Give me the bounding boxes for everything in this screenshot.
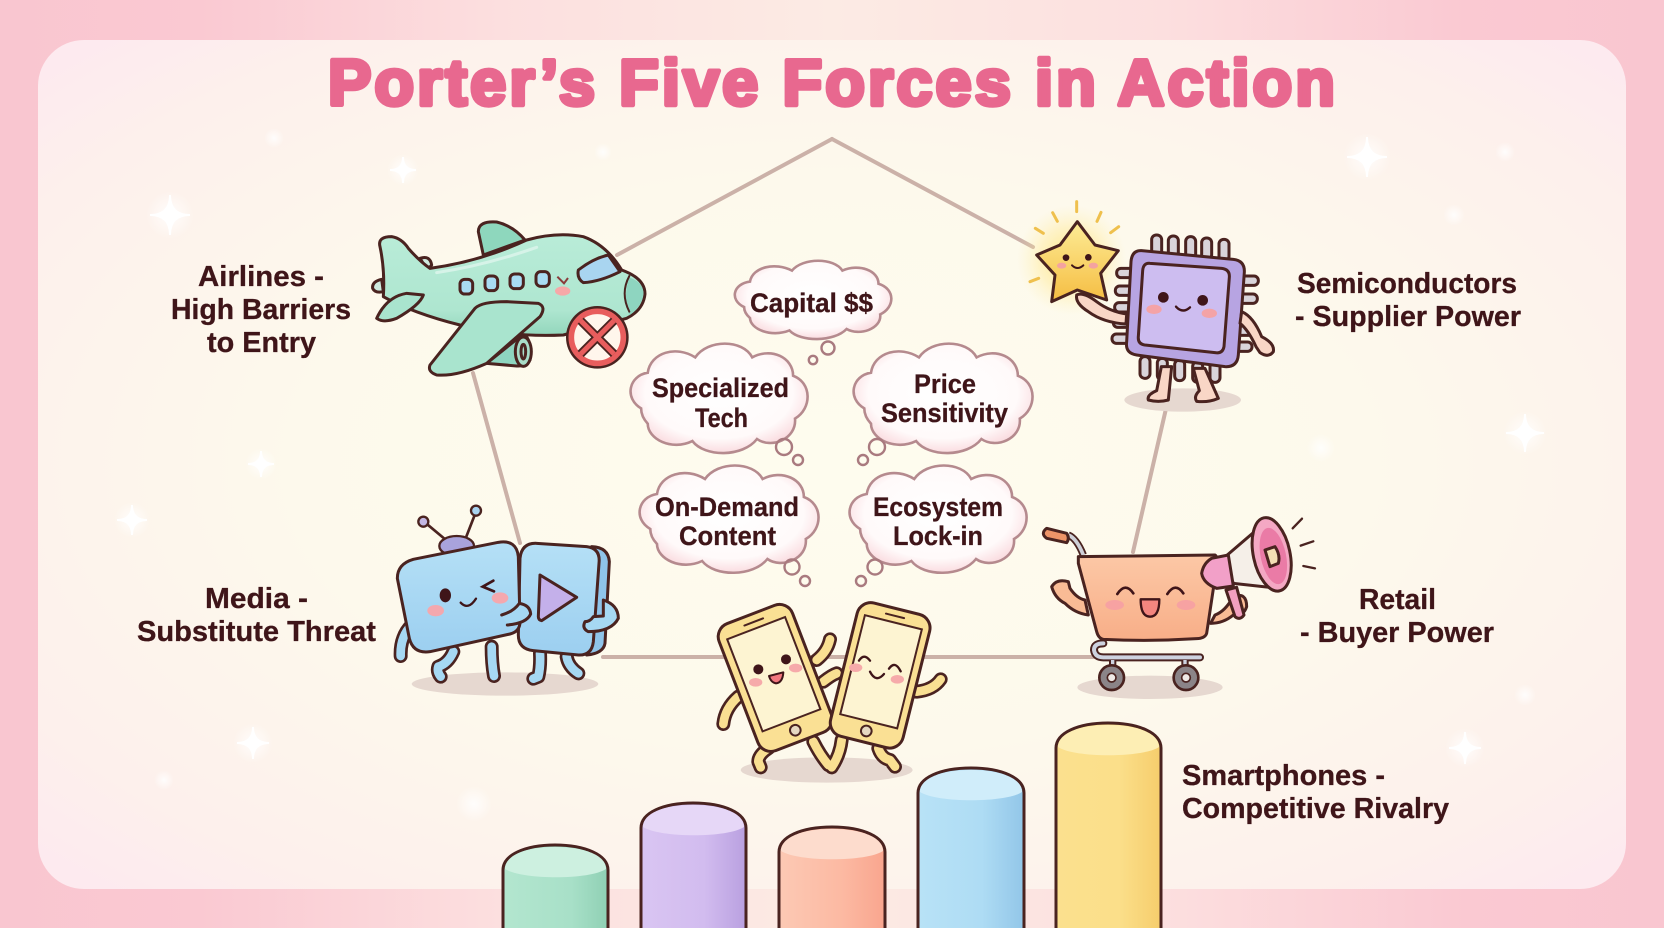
left arm <box>1052 581 1088 615</box>
basket <box>1078 555 1217 640</box>
engine <box>487 337 531 366</box>
star <box>1037 222 1118 302</box>
label: Airlines: High Barriers <box>171 294 351 326</box>
play triangle <box>538 575 577 621</box>
label: Semiconductors: - Supplier Power <box>1295 301 1521 333</box>
background sparkles <box>114 128 1547 822</box>
tail wing <box>478 222 525 255</box>
bar chart: five rising cylinders <box>503 723 1161 928</box>
pentagon framework lines <box>473 139 1168 657</box>
thought cloud: Specialized Tech: Tech <box>695 403 748 433</box>
thought cloud: Specialized Tech: Specialized <box>652 373 789 403</box>
chip face <box>1158 292 1169 303</box>
right phone <box>827 600 933 751</box>
thought cloud: On-Demand Content: On-Demand <box>655 492 799 522</box>
right arm holding megaphone <box>1211 595 1247 623</box>
label: Airlines <box>171 261 351 359</box>
shadow <box>741 757 913 783</box>
bar: orange <box>779 827 885 928</box>
nose cone <box>626 277 643 315</box>
star face <box>1063 254 1069 261</box>
bar: yellow <box>1056 723 1161 928</box>
thought cloud: Price Sensitivity: Price <box>914 369 976 399</box>
thought cloud: Capital $$: Capital $$ <box>750 288 873 318</box>
chip legs <box>1148 367 1172 401</box>
left phone face <box>753 664 763 674</box>
cheek and mark <box>555 286 570 296</box>
rear stabilizer stubs <box>373 257 432 292</box>
streaming tablet <box>518 543 599 655</box>
chip shadow <box>1124 388 1241 412</box>
label: Retail: - Buyer Power <box>1300 617 1494 649</box>
tablet back edge <box>587 547 609 655</box>
chip arms <box>1076 294 1127 324</box>
force: retail shopping cart with megaphone icon <box>1043 514 1315 699</box>
thought cloud: Specialized Tech <box>631 344 808 465</box>
label: Semiconductors: Semiconductors <box>1297 268 1517 300</box>
hugging arms <box>502 603 531 625</box>
label: Retail: Retail <box>1359 584 1436 616</box>
antenna <box>418 506 481 556</box>
label: Airlines: to Entry <box>207 327 316 359</box>
force: smartphones rivalry icon <box>714 600 941 783</box>
no-entry badge <box>566 306 629 369</box>
chip body <box>1126 251 1244 367</box>
label: Retail <box>1300 584 1494 649</box>
force: semiconductor chip with star icon <box>1017 202 1274 412</box>
sound lines <box>1293 519 1315 568</box>
star rays <box>1030 202 1119 282</box>
fuselage <box>380 235 645 335</box>
fuselage highlight <box>437 247 537 273</box>
TV face <box>440 588 451 602</box>
right phone face <box>859 657 901 671</box>
label: Media <box>137 583 376 648</box>
wheels <box>1099 665 1198 690</box>
chip inner plate <box>1138 263 1229 353</box>
label: Media: Substitute Threat <box>137 616 376 648</box>
shadow <box>1077 676 1223 699</box>
title: Porter’s Five Forces in Action <box>328 46 1335 119</box>
TV body <box>397 542 520 652</box>
legs and arms <box>723 639 941 767</box>
bar: purple <box>641 803 746 928</box>
thought cloud: On-Demand Content <box>640 466 819 586</box>
cockpit window <box>578 255 620 283</box>
label: Smartphones: Competitive Rivalry <box>1182 793 1449 825</box>
chip pins <box>1112 235 1258 382</box>
thought cloud: On-Demand Content: Content <box>679 521 776 551</box>
thought cloud: Ecosystem Lock-in: Ecosystem <box>873 492 1003 522</box>
label: Semiconductors <box>1295 268 1521 333</box>
star glow <box>1017 205 1127 315</box>
bar: green <box>503 845 608 928</box>
cart frame <box>1094 643 1200 670</box>
shadow <box>412 672 598 696</box>
megaphone <box>1202 514 1297 595</box>
label: Smartphones <box>1182 760 1449 825</box>
force: airlines plane icon <box>373 222 645 375</box>
TV left arm <box>401 625 412 656</box>
windows <box>460 272 549 294</box>
label: Smartphones: Smartphones - <box>1182 760 1385 792</box>
thought cloud: Capital $$ <box>735 261 891 364</box>
front wing <box>429 302 543 375</box>
label: Media: Media - <box>205 583 308 615</box>
stabilizer <box>377 293 423 321</box>
left phone <box>714 600 836 756</box>
bar: blue <box>918 768 1024 928</box>
basket face <box>1117 588 1183 594</box>
thought cloud: Price Sensitivity <box>854 344 1033 465</box>
force: media TV and streaming tablet icon <box>397 506 618 696</box>
thought cloud: Price Sensitivity: Sensitivity <box>881 398 1008 428</box>
label: Airlines: Airlines - <box>198 261 324 293</box>
thought cloud: Ecosystem Lock-in <box>850 466 1027 586</box>
legs <box>438 647 578 679</box>
thought cloud: Ecosystem Lock-in: Lock-in <box>893 521 983 551</box>
cart handle <box>1068 535 1083 555</box>
